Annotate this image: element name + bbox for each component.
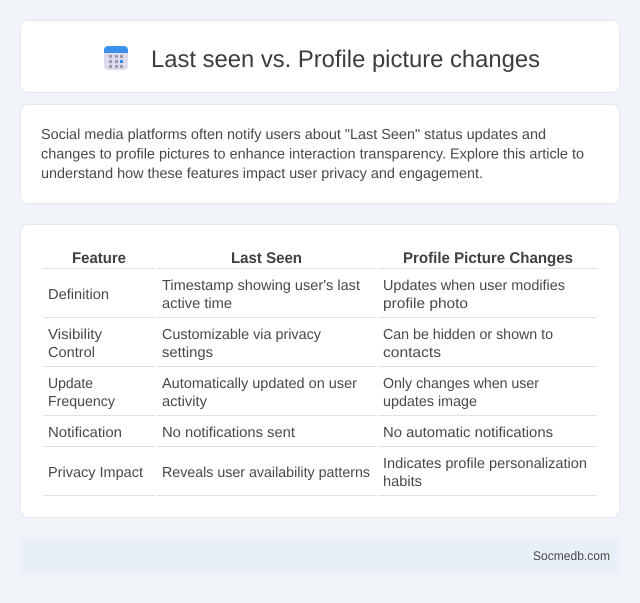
panel: title card (20, 20, 620, 92)
row: update frequency: Only changes when user (383, 376, 539, 392)
panel: introduction (20, 104, 620, 204)
row: visibility control: Control (48, 345, 95, 361)
row: privacy impact: habits (383, 474, 422, 490)
table header (72, 250, 573, 267)
row: definition (48, 278, 565, 312)
panel: comparison table (20, 224, 620, 518)
row: update frequency: Automatically updated on user (162, 376, 357, 392)
text block: introduction: understand how these features impact user privacy and engagement. (41, 166, 483, 182)
text block: introduction: Social media platforms often notify users about "Last Seen" status updates and (41, 127, 546, 143)
row: definition: Definition (48, 287, 109, 303)
row: update frequency: updates image (383, 394, 477, 410)
row: update frequency: activity (162, 394, 208, 410)
text block: introduction (41, 127, 584, 182)
row: visibility control: settings (162, 345, 213, 361)
row: update frequency (48, 376, 539, 410)
row: definition: profile photo (383, 296, 468, 312)
icon: calendar (104, 46, 128, 70)
row: update frequency: Frequency (48, 394, 116, 410)
row: visibility control: Can be hidden or shown to (383, 327, 553, 343)
title: Last seen vs. Profile picture changes (151, 46, 540, 73)
row: privacy impact (48, 456, 587, 490)
table header: Feature (72, 250, 126, 267)
row: definition: Updates when user modifies (383, 278, 565, 294)
row: visibility control: contacts (383, 345, 441, 361)
row: update frequency: Update (48, 376, 93, 392)
row: visibility control (48, 327, 553, 361)
row: notification: Notification (48, 425, 122, 441)
row: notification: No notifications sent (162, 425, 295, 441)
footer text: Socmedb.com (533, 549, 610, 563)
row: visibility control: Visibility (48, 327, 103, 343)
row: notification: No automatic notifications (383, 425, 553, 441)
table header: Last Seen (231, 250, 302, 267)
row: privacy impact: Privacy Impact (48, 465, 143, 481)
row: definition: active time (162, 296, 232, 312)
row: privacy impact: Indicates profile personalization (383, 456, 587, 472)
footer (20, 539, 620, 573)
row: notification (48, 425, 553, 441)
table header: Profile Picture Changes (403, 250, 573, 267)
row: privacy impact: Reveals user availability patterns (162, 465, 370, 481)
row: visibility control: Customizable via privacy (162, 327, 322, 343)
text block: introduction: changes to profile pictures to enhance interaction transparency. Explore this article to (41, 146, 584, 162)
row: definition: Timestamp showing user's last (162, 278, 360, 294)
